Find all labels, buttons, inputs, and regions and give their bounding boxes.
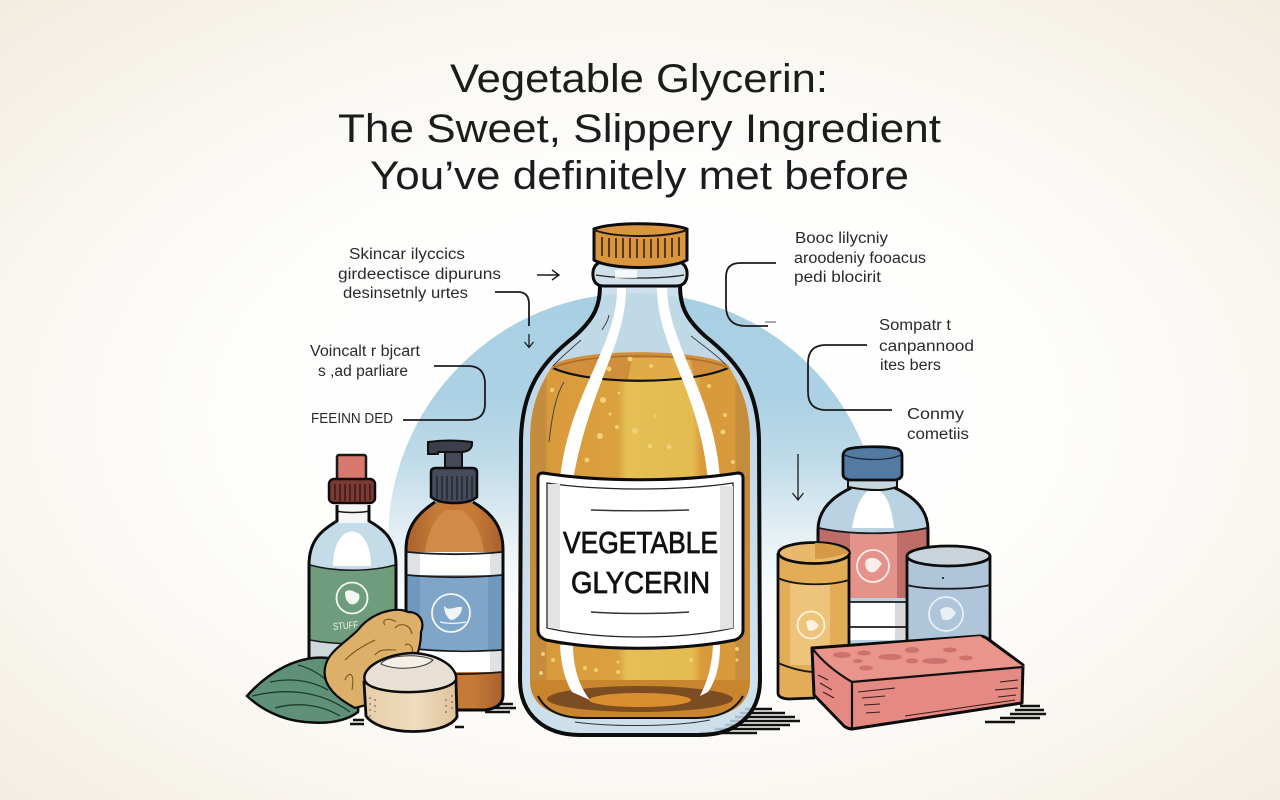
callout: left middle: FEEINN DED <box>311 410 393 427</box>
pink soap bar <box>812 636 1024 729</box>
callout: left middle: Voincalt r bjcart <box>310 343 421 360</box>
pink label bottle <box>818 447 928 645</box>
brown pump bottle <box>406 440 503 710</box>
main bottle: GLYCERIN <box>571 565 710 600</box>
product label <box>538 473 743 648</box>
sponge <box>325 610 422 708</box>
ground shadow lines <box>350 704 1046 733</box>
callout: right middle: Conmy <box>907 406 964 423</box>
callout: top right: Booc lilycniy <box>795 230 888 247</box>
callout: top right: pedi blocirit <box>794 269 882 286</box>
icon: swirl badge <box>798 612 824 638</box>
leaf <box>247 658 358 723</box>
neck ring <box>593 262 687 286</box>
yellow canister <box>778 542 850 700</box>
liquid surface <box>553 368 728 381</box>
glass body <box>520 286 760 735</box>
callout: left middle <box>310 343 485 427</box>
blue cap <box>843 447 902 480</box>
icon: drop badge <box>432 594 470 632</box>
cap <box>594 224 687 268</box>
main bottle <box>520 224 760 735</box>
cream jar <box>364 653 457 732</box>
stopper <box>337 455 366 481</box>
callout: skincare top left: Skincar ilyccics <box>349 246 465 263</box>
callout: skincare top left: desinsetnly urtes <box>343 285 468 302</box>
title: You’ve definitely met before <box>370 154 909 198</box>
callout: top right <box>726 230 926 326</box>
blue canister <box>907 546 990 645</box>
icon: swirl badge <box>929 597 963 631</box>
liquid <box>530 345 750 720</box>
callout: skincare top left <box>338 246 559 348</box>
callout: top right: aroodeniy fooacus <box>794 250 926 267</box>
main bottle: VEGETABLE <box>563 525 718 560</box>
green bottle <box>309 455 396 664</box>
callout: left middle: s ,ad parliare <box>318 363 408 380</box>
icon: leaf badge <box>336 582 368 614</box>
callout: skincare top left: girdeectisce dipuruns <box>338 266 501 283</box>
callout: right middle: ites bers <box>880 357 941 374</box>
bottle outline <box>520 286 760 735</box>
green bottle: STUFF <box>333 620 358 633</box>
blue circle backdrop <box>388 293 882 787</box>
callout: right middle <box>792 317 974 500</box>
callout: right middle: canpannood <box>879 338 974 355</box>
title: Vegetable Glycerin: <box>450 57 828 101</box>
icon: swirl badge <box>857 550 889 582</box>
pump <box>445 452 462 470</box>
title: The Sweet, Slippery Ingredient <box>338 107 941 151</box>
title <box>338 57 941 198</box>
collar <box>329 479 375 503</box>
callout: right middle: cometiis <box>907 426 969 443</box>
callout: right middle: Sompatr t <box>879 317 952 334</box>
glass highlights <box>560 288 626 480</box>
